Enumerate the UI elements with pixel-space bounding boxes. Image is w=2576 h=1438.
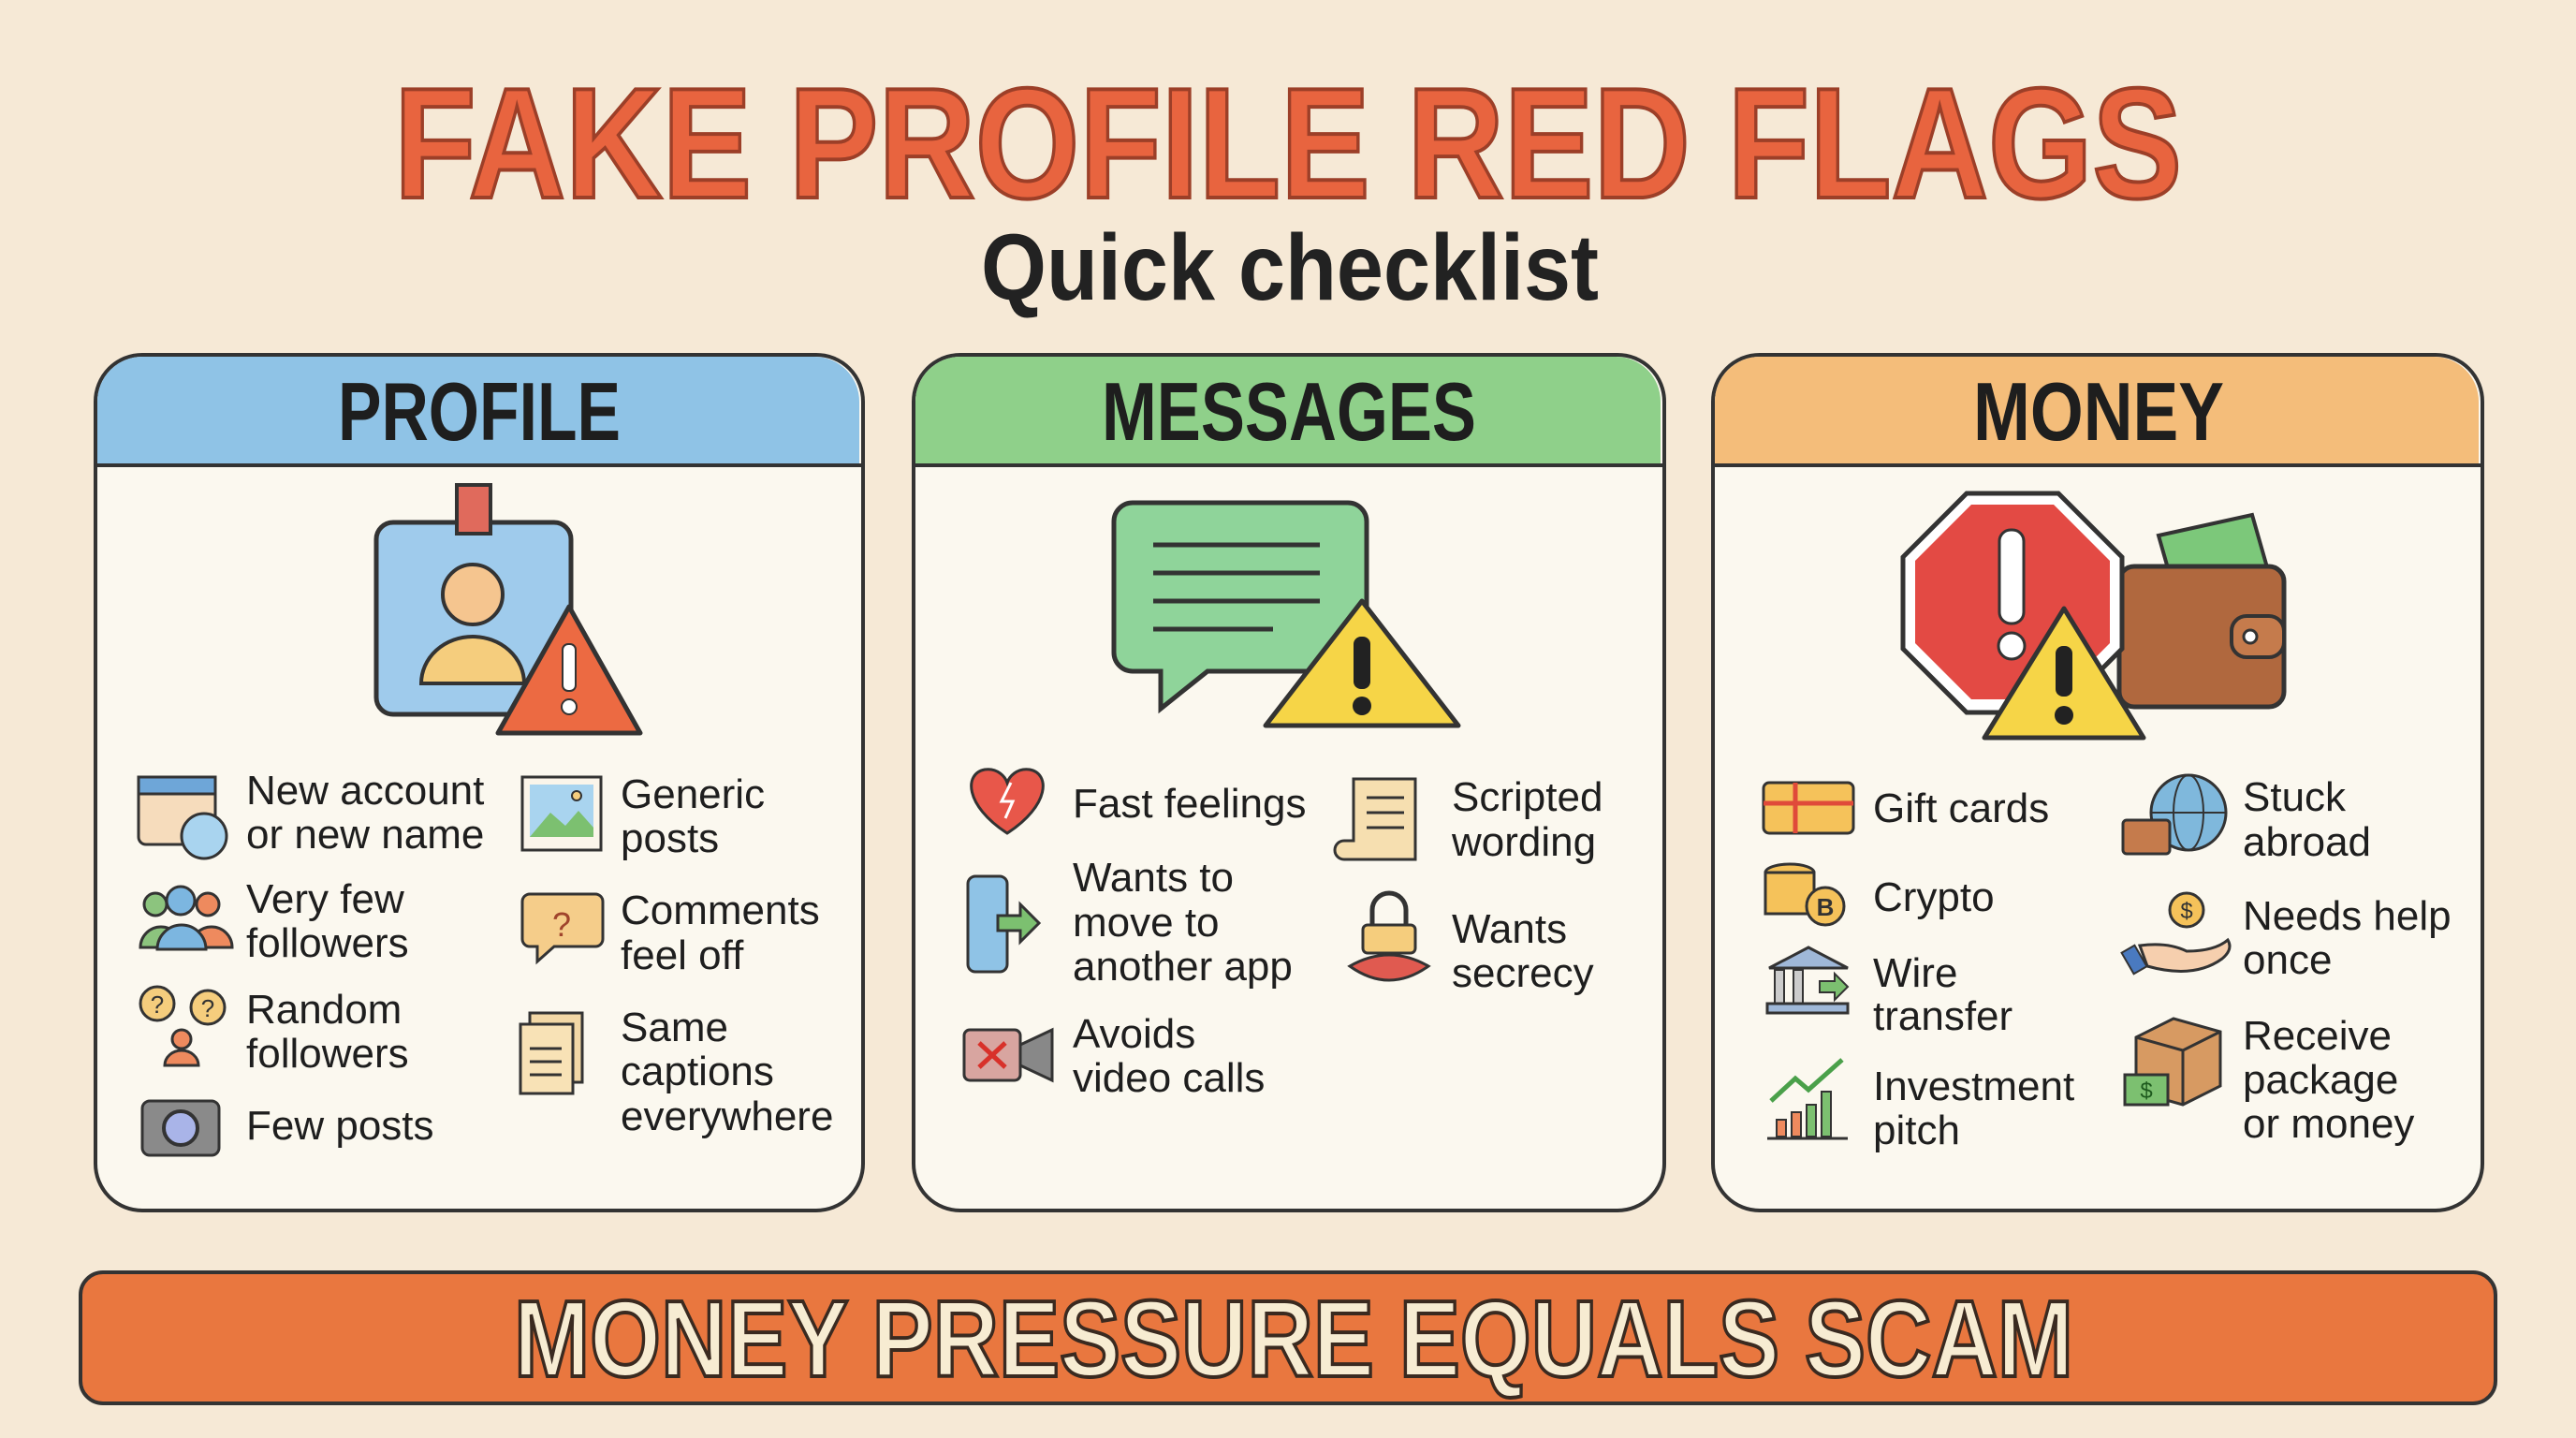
- item: few posts: Few posts: [246, 1103, 434, 1149]
- item: avoids video calls: Avoids: [1073, 1011, 1195, 1057]
- item: wants secrecy: Wants: [1452, 906, 1567, 952]
- item: move app: another app: [1073, 944, 1293, 990]
- icon: chat bubble warning: [1114, 503, 1458, 726]
- heading: messages: MESSAGES: [1102, 365, 1476, 458]
- item: random followers: followers: [246, 1031, 409, 1077]
- item: same captions: [520, 1005, 833, 1139]
- item: avoids video calls: video calls: [1073, 1055, 1265, 1101]
- item: stuck abroad: Stuck: [2243, 774, 2347, 820]
- item: scripted wording: Scripted: [1452, 774, 1603, 820]
- item: avoids video calls: [964, 1011, 1265, 1101]
- item: fast feelings: [972, 770, 1306, 833]
- item: receive package: Receive: [2243, 1013, 2392, 1059]
- item: comments feel off: ?: [552, 905, 571, 944]
- item: same captions: everywhere: [621, 1093, 833, 1139]
- item: random followers: ?: [151, 990, 164, 1019]
- item: very few followers: Very few: [246, 876, 404, 922]
- item: comments feel off: feel off: [621, 932, 744, 978]
- item: investment pitch: Investment: [1873, 1064, 2074, 1109]
- item: crypto: [1765, 864, 1995, 925]
- item: needs help once: [2122, 893, 2452, 983]
- item: random followers: [140, 987, 409, 1077]
- heading: profile: PROFILE: [338, 365, 621, 458]
- banner: money pressure equals scam: MONEY PRESSURE EQUALS SCAM: [514, 1278, 2073, 1400]
- item: stuck abroad: abroad: [2243, 819, 2371, 865]
- item: move app: [968, 855, 1293, 990]
- item: receive package: package: [2243, 1057, 2398, 1103]
- item: gift cards: Gift cards: [1873, 785, 2049, 831]
- panel: profile: [95, 355, 863, 1211]
- item: comments feel off: Comments: [621, 888, 820, 933]
- item: needs help once: once: [2243, 937, 2332, 983]
- item: random followers: Random: [246, 987, 402, 1033]
- item: stuck abroad: [2123, 774, 2371, 865]
- item: scripted wording: [1335, 774, 1603, 865]
- item: move app: Wants to: [1073, 855, 1234, 901]
- item: same captions: captions: [621, 1049, 774, 1094]
- item: new account: New account: [246, 768, 484, 814]
- item: crypto: Crypto: [1873, 874, 1995, 920]
- item: crypto: B: [1817, 893, 1834, 921]
- item: comments feel off: [522, 888, 820, 978]
- item: wants secrecy: [1350, 893, 1594, 996]
- item: needs help once: Needs help: [2243, 893, 2452, 939]
- item: very few followers: [140, 876, 409, 966]
- item: investment pitch: [1767, 1060, 2074, 1153]
- item: new account: [139, 768, 484, 858]
- title: FAKE PROFILE RED FLAGS: [394, 55, 2182, 231]
- item: random followers: ?: [201, 994, 214, 1022]
- item: wire transfer: [1767, 947, 2012, 1039]
- item: few posts: [142, 1101, 434, 1155]
- item: very few followers: followers: [246, 920, 409, 966]
- item: wants secrecy: secrecy: [1452, 950, 1594, 996]
- panel: money: [1713, 355, 2482, 1211]
- icon: id card warning: [376, 485, 640, 733]
- item: generic posts: Generic: [621, 771, 765, 817]
- item: fast feelings: Fast feelings: [1073, 781, 1306, 827]
- item: move app: move to: [1073, 900, 1220, 946]
- item: generic posts: posts: [621, 815, 719, 861]
- item: wire transfer: transfer: [1873, 993, 2012, 1039]
- item: receive package: or money: [2243, 1101, 2414, 1147]
- heading: money: MONEY: [1973, 365, 2224, 458]
- item: wire transfer: Wire: [1873, 950, 1957, 996]
- item: generic posts: [522, 771, 765, 861]
- item: receive package: $: [2140, 1078, 2153, 1104]
- item: receive package: [2125, 1013, 2414, 1147]
- item: needs help once: $: [2180, 899, 2193, 924]
- item: same captions: Same: [621, 1005, 728, 1050]
- item: new account: or new name: [246, 812, 484, 858]
- icon: stop sign wallet warning: [1903, 493, 2284, 738]
- subtitle: Quick checklist: [981, 215, 1599, 320]
- item: gift cards: [1764, 783, 2049, 833]
- item: scripted wording: wording: [1451, 819, 1596, 865]
- panel: messages: [914, 355, 1664, 1211]
- item: investment pitch: pitch: [1873, 1108, 1960, 1153]
